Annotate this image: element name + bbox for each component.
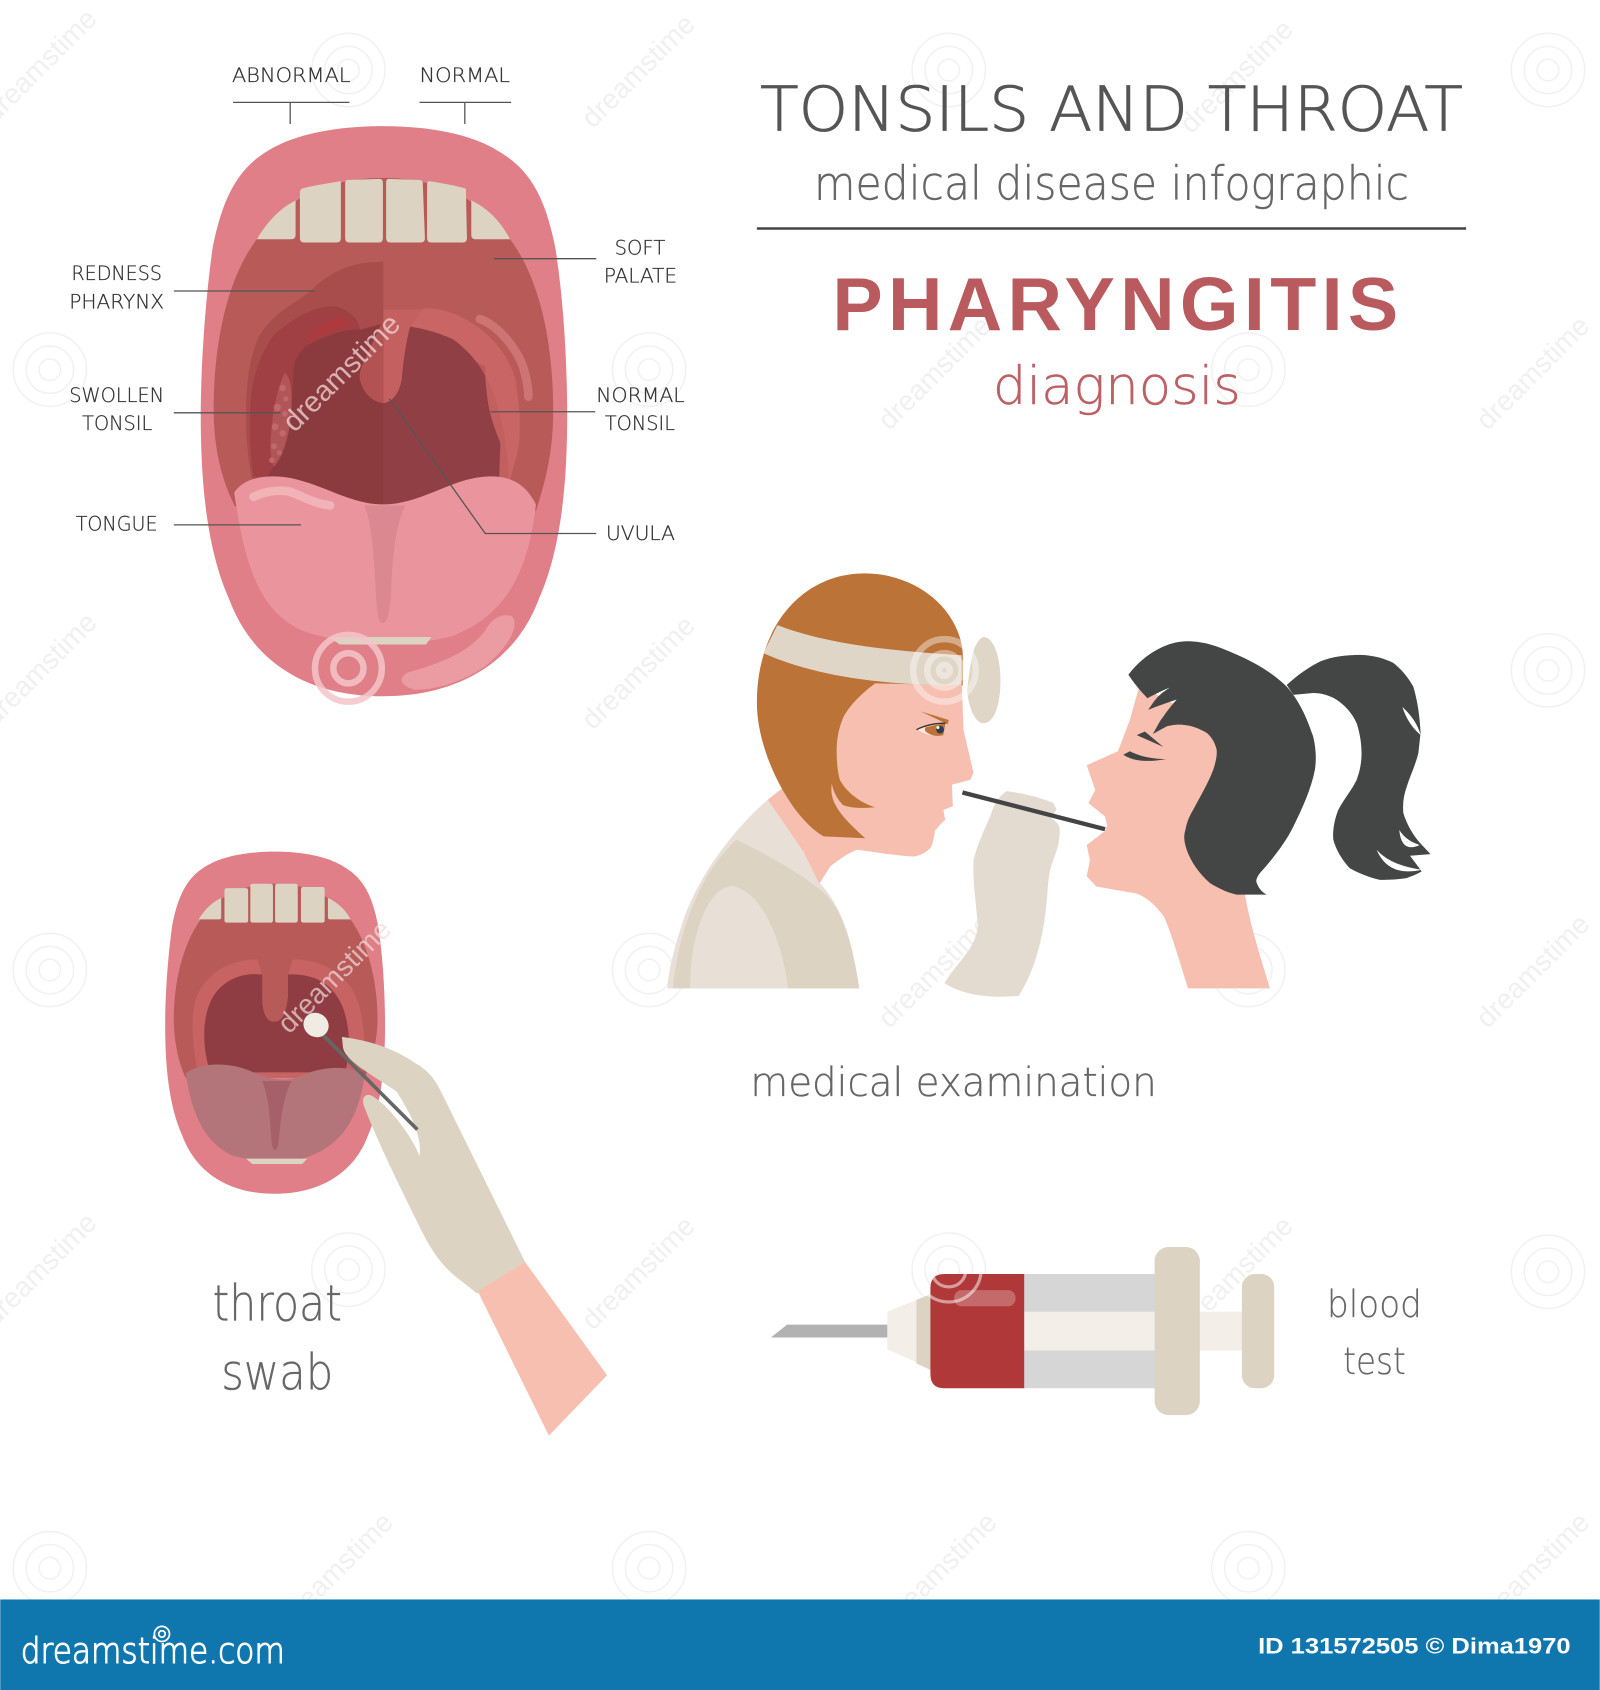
- footer logo swirl: [154, 1626, 169, 1641]
- lower lip highlight: [402, 615, 515, 690]
- patient ponytail: [1287, 655, 1431, 880]
- caption: throat swab: throat: [213, 1274, 342, 1332]
- redness patch: [306, 317, 349, 343]
- doctor face and neck: [768, 679, 974, 884]
- illustration: medical examination, doctor and patient: [667, 573, 1431, 997]
- footer image id: ID 131572505 © Dima1970: [1258, 1633, 1571, 1658]
- label: normal: NORMAL: [420, 64, 510, 87]
- small mouth tongue groove: [262, 1081, 291, 1150]
- label: swollen tonsil: SWOLLEN: [69, 384, 164, 407]
- uvula, left half: [360, 319, 383, 403]
- pharynx, left half: [265, 323, 383, 509]
- label: swollen tonsil: [69, 384, 280, 435]
- lower teeth: [329, 637, 431, 645]
- doctor eyebrow: [921, 711, 949, 724]
- watermark swirl: [315, 635, 382, 702]
- infographic canvas: dreamstime: [1470, 310, 1595, 435]
- coat shading: [673, 840, 859, 988]
- watermark swirl: [913, 639, 976, 702]
- gloved hand: [342, 1037, 525, 1293]
- upper teeth: [257, 179, 510, 243]
- label: soft palate: SOFT: [615, 236, 665, 259]
- uvula, right half: [383, 309, 423, 403]
- label: abnormal: [232, 64, 351, 124]
- label: redness pharynx: PHARYNX: [69, 290, 164, 313]
- ponytail highlights: [1377, 707, 1422, 871]
- left side: redness of pharynx: [246, 262, 383, 507]
- small mouth arch: [193, 959, 364, 1078]
- caption: blood test: [1327, 1282, 1422, 1383]
- flange: [1155, 1247, 1200, 1415]
- head band: [763, 625, 962, 685]
- syringe nozzle: [887, 1298, 922, 1365]
- patient hair: [1128, 641, 1316, 895]
- illustration: open mouth, abnormal vs normal: [201, 126, 567, 702]
- title: tonsils and throat: TONSILS AND THROAT: [760, 74, 1463, 145]
- infographic canvas: dreamstime: [877, 1506, 1003, 1632]
- swab cotton tip: [299, 1008, 333, 1042]
- tongue depressor: [962, 793, 1105, 829]
- heading: pharyngitis: PHARYNGITIS: [832, 262, 1398, 346]
- subtitle: medical disease infographic: medical disease infographic: [814, 156, 1409, 210]
- normal right arch: [407, 308, 520, 481]
- illustration: blood test syringe: [771, 1237, 1274, 1415]
- label: normal tonsil: [491, 384, 685, 435]
- small mouth lower teeth: [246, 1159, 307, 1164]
- label: swollen tonsil: TONSIL: [82, 412, 152, 435]
- label: soft palate: [494, 236, 677, 287]
- infographic canvas: dreamstime: [274, 1506, 399, 1632]
- label: uvula: [389, 399, 675, 545]
- right arch highlight: [480, 319, 528, 397]
- subheading: diagnosis: diagnosis: [993, 356, 1241, 417]
- label: uvula: UVULA: [606, 522, 675, 545]
- doctor coat: [667, 800, 859, 988]
- plunger rod: [1024, 1312, 1245, 1350]
- barrel: [1019, 1274, 1159, 1388]
- patient eye and eyebrow: [1123, 732, 1166, 761]
- small mouth tongue: [186, 1064, 365, 1161]
- footer logo: dreamstime.com: [21, 1631, 285, 1672]
- infographic canvas: dreamstime: [1470, 1506, 1595, 1632]
- needle: [771, 1325, 888, 1338]
- footer bar: [0, 1599, 1600, 1690]
- small mouth cavity: [174, 884, 378, 1078]
- tongue median groove: [365, 505, 406, 623]
- plunger end: [1242, 1274, 1274, 1388]
- infographic canvas: dreamstime: [575, 1210, 701, 1335]
- small mouth lips: [165, 852, 385, 1194]
- infographic canvas: dreamstime: [575, 8, 701, 134]
- infographic canvas: dreamstime: [872, 310, 997, 435]
- head mirror: [967, 637, 1000, 723]
- swab stick: [319, 1031, 417, 1130]
- infographic canvas: dreamstime: [872, 908, 997, 1034]
- label: normal tonsil: NORMAL: [596, 384, 685, 407]
- label: abnormal: ABNORMAL: [232, 64, 351, 87]
- infographic canvas: dreamstime: [1470, 908, 1595, 1034]
- small mouth uvula: [256, 954, 295, 1022]
- label: normal tonsil: TONSIL: [605, 412, 675, 435]
- label: tongue: TONGUE: [76, 512, 158, 535]
- blood: [930, 1274, 1024, 1388]
- infographic canvas: dreamstime: [575, 610, 701, 735]
- illustration: open mouth, abnormal vs normal: dreamstime: [277, 308, 407, 438]
- doctor hair: [757, 573, 963, 838]
- caption: blood test: test: [1343, 1339, 1406, 1383]
- label: soft palate: PALATE: [604, 264, 677, 287]
- small mouth pharynx: [204, 974, 349, 1072]
- caption: throat swab: swab: [221, 1343, 333, 1401]
- infographic canvas: dreamstime: [1174, 1210, 1299, 1335]
- lips: [201, 126, 567, 696]
- tongue: [234, 476, 536, 643]
- small mouth upper teeth: [199, 884, 351, 923]
- swollen red left arch: [250, 306, 360, 480]
- tongue highlight: [254, 491, 330, 505]
- coat inner panel: [690, 886, 788, 988]
- illustration: throat swab: dreamstime: [271, 914, 397, 1039]
- infographic canvas: dreamstime: [1174, 14, 1299, 139]
- label: redness pharynx: REDNESS: [71, 262, 162, 285]
- patient face and neck: [1087, 685, 1270, 988]
- pharynx, right half: [383, 323, 500, 509]
- normal tonsil: [485, 376, 509, 481]
- examining glove: [944, 791, 1060, 997]
- label: redness pharynx: [69, 262, 315, 313]
- label: normal: [420, 64, 511, 124]
- swollen tonsil spots: [269, 373, 292, 467]
- caption: blood test: blood: [1327, 1282, 1422, 1326]
- doctor eye: [916, 723, 946, 736]
- mouth cavity: [214, 178, 553, 511]
- caption: medical examination: medical examination: [750, 1060, 1157, 1106]
- forearm: [478, 1262, 607, 1436]
- illustration: throat swab: [165, 852, 607, 1436]
- caption: throat swab: [213, 1274, 342, 1401]
